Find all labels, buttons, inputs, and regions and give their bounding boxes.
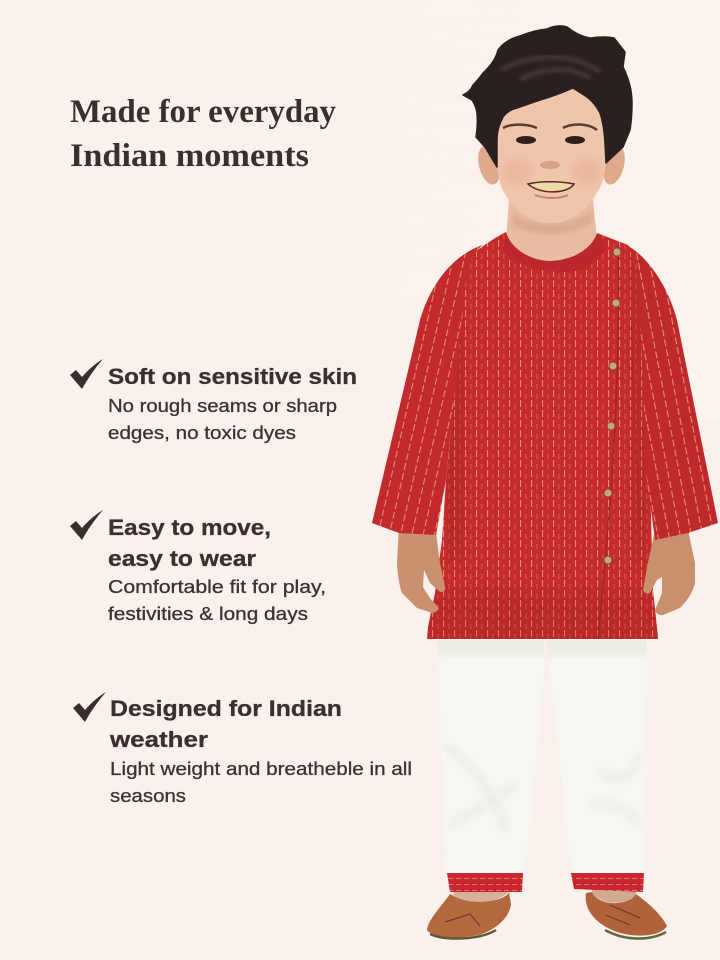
icon: check mark — [73, 692, 106, 722]
head — [463, 26, 632, 223]
heading: easy to wear — [108, 546, 256, 571]
description — [110, 759, 412, 806]
eyes and brows — [503, 124, 597, 144]
heading: Soft on sensitive skin — [108, 364, 357, 389]
neck — [506, 200, 597, 268]
kurta body — [427, 232, 660, 650]
white trousers — [437, 640, 647, 826]
icon: check mark — [70, 359, 103, 389]
nose — [540, 161, 560, 169]
heading: Easy to move, — [108, 515, 271, 540]
smile — [528, 182, 574, 198]
description: No rough seams or sharp — [108, 396, 337, 416]
title — [70, 94, 336, 174]
description — [108, 396, 337, 443]
photo: smiling boy in red kurta — [372, 26, 718, 939]
benefit: easy to move — [70, 510, 326, 624]
title: Indian moments — [70, 138, 309, 174]
title: Made for everyday — [70, 94, 336, 130]
heading — [109, 696, 342, 752]
description: festivities & long days — [108, 604, 308, 624]
benefit: soft on sensitive skin — [70, 359, 357, 443]
face — [496, 85, 606, 223]
description: Comfortable fit for play, — [108, 577, 326, 597]
description: edges, no toxic dyes — [108, 423, 296, 443]
left sleeve — [372, 245, 482, 535]
heading: weather — [109, 727, 209, 752]
shoes — [427, 888, 667, 939]
trouser cuffs — [447, 873, 644, 892]
icon: check mark — [70, 510, 103, 540]
kurta buttons — [604, 248, 621, 564]
hair — [463, 26, 632, 167]
kurta collar — [503, 232, 608, 272]
heading: Designed for Indian — [110, 696, 342, 721]
left hand — [397, 525, 445, 613]
description — [108, 577, 326, 624]
description: seasons — [110, 786, 186, 806]
ears — [474, 143, 504, 187]
heading — [108, 515, 271, 571]
description: Light weight and breatheble in all — [110, 759, 412, 779]
right sleeve — [622, 243, 718, 540]
right hand — [643, 530, 695, 615]
benefit: designed for Indian weather — [73, 692, 412, 806]
